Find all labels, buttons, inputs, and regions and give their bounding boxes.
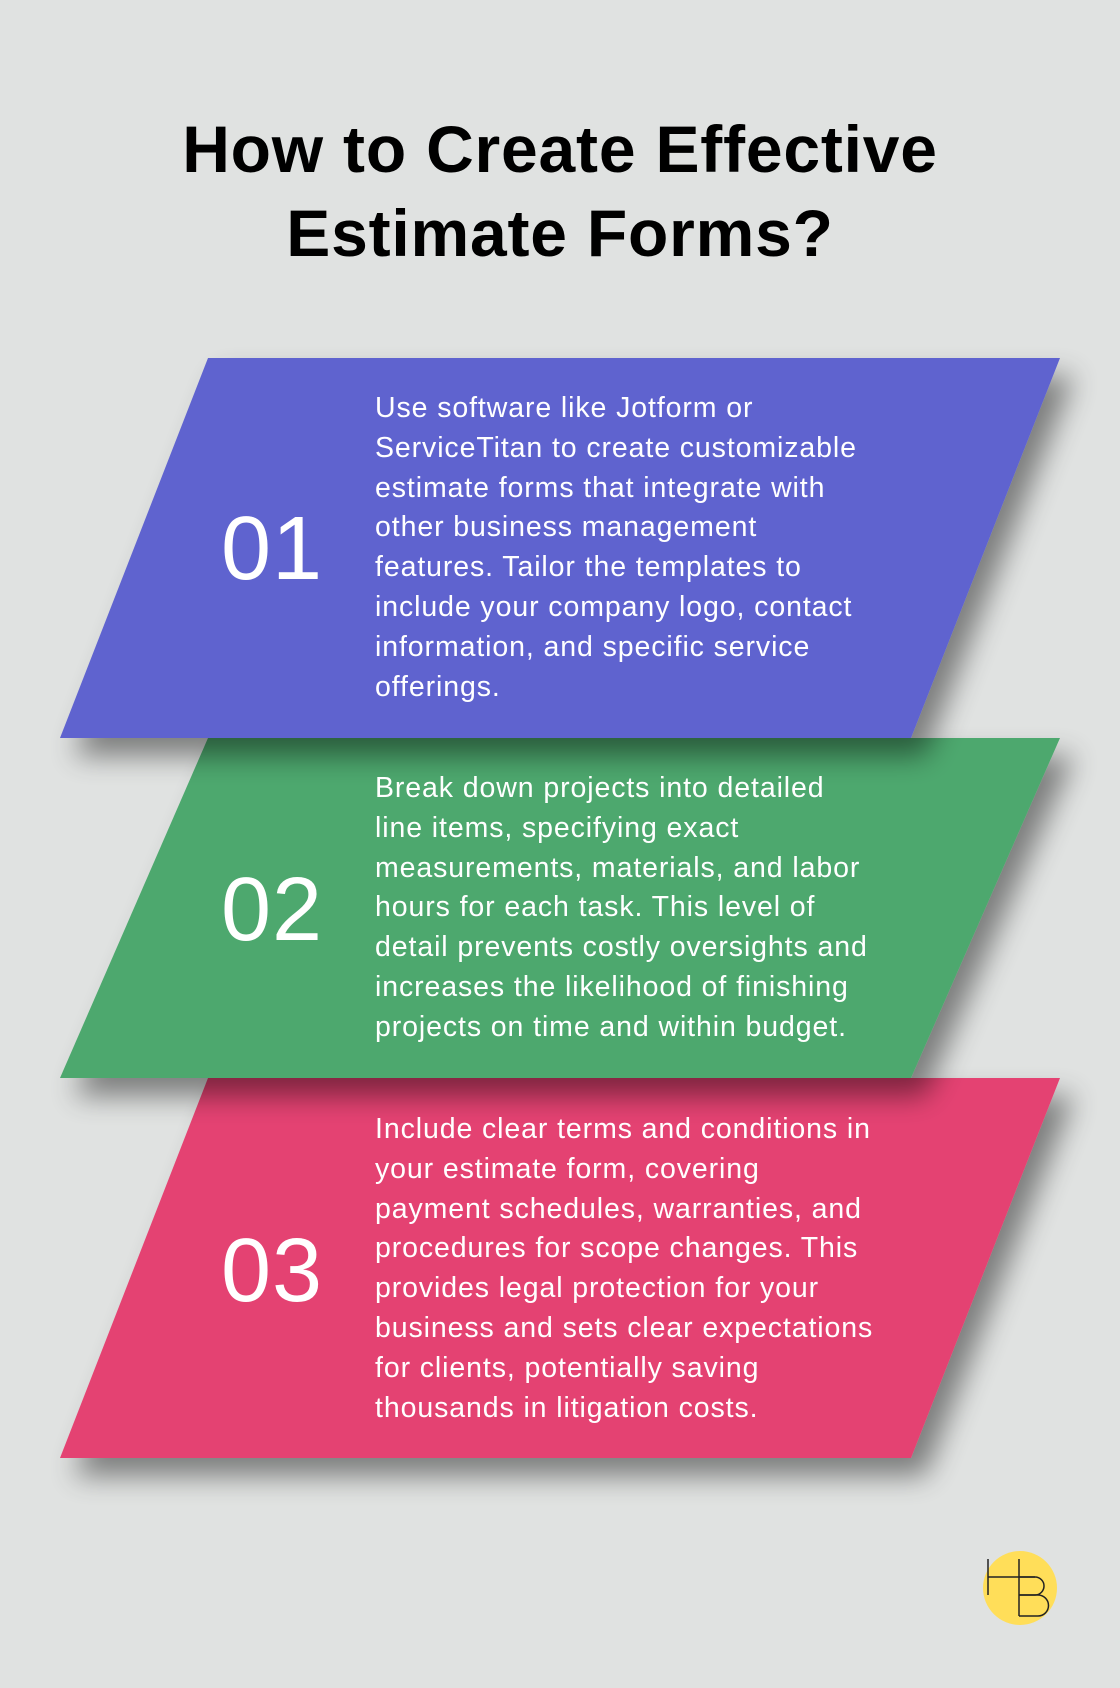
text 3: procedures for scope changes. This (375, 1232, 858, 1264)
text 3: payment schedules, warranties, and (375, 1193, 862, 1225)
text 2: increases the likelihood of finishing (375, 971, 849, 1003)
text 1: information, and specific service (375, 631, 810, 663)
text 1: include your company logo, contact (375, 591, 852, 623)
text 3: your estimate form, covering (375, 1153, 760, 1185)
text 3: provides legal protection for your (375, 1272, 819, 1304)
panel 3 shape (60, 1078, 1060, 1458)
text 1: Use software like Jotform or (375, 392, 753, 424)
text 3: for clients, potentially saving (375, 1352, 759, 1384)
text 2: projects on time and within budget. (375, 1011, 847, 1043)
text 3: thousands in litigation costs. (375, 1392, 758, 1424)
number 03: 03 (221, 1221, 323, 1321)
text 2 (375, 772, 868, 1043)
text 2: measurements, materials, and labor (375, 852, 860, 884)
title: How to Create Effective (182, 112, 938, 186)
text 1 (375, 392, 857, 703)
text 2: line items, specifying exact (375, 812, 739, 844)
text 2: hours for each task. This level of (375, 891, 815, 923)
panel 1 shape (60, 358, 1060, 738)
text 1: ServiceTitan to create customizable (375, 432, 857, 464)
text 1: estimate forms that integrate with (375, 472, 825, 504)
text 1: offerings. (375, 671, 501, 703)
text 1: other business management (375, 511, 757, 543)
text 2: Break down projects into detailed (375, 772, 825, 804)
number 01: 01 (221, 499, 323, 599)
text 3: business and sets clear expectations (375, 1312, 873, 1344)
number 02: 02 (221, 860, 323, 960)
panel 2 shape (60, 738, 1060, 1078)
text 1: features. Tailor the templates to (375, 551, 802, 583)
text 3 (375, 1113, 873, 1424)
text 3: Include clear terms and conditions in (375, 1113, 871, 1145)
text 2: detail prevents costly oversights and (375, 931, 868, 963)
logo (983, 1551, 1057, 1625)
title: Estimate Forms? (286, 196, 834, 270)
title (182, 112, 938, 270)
